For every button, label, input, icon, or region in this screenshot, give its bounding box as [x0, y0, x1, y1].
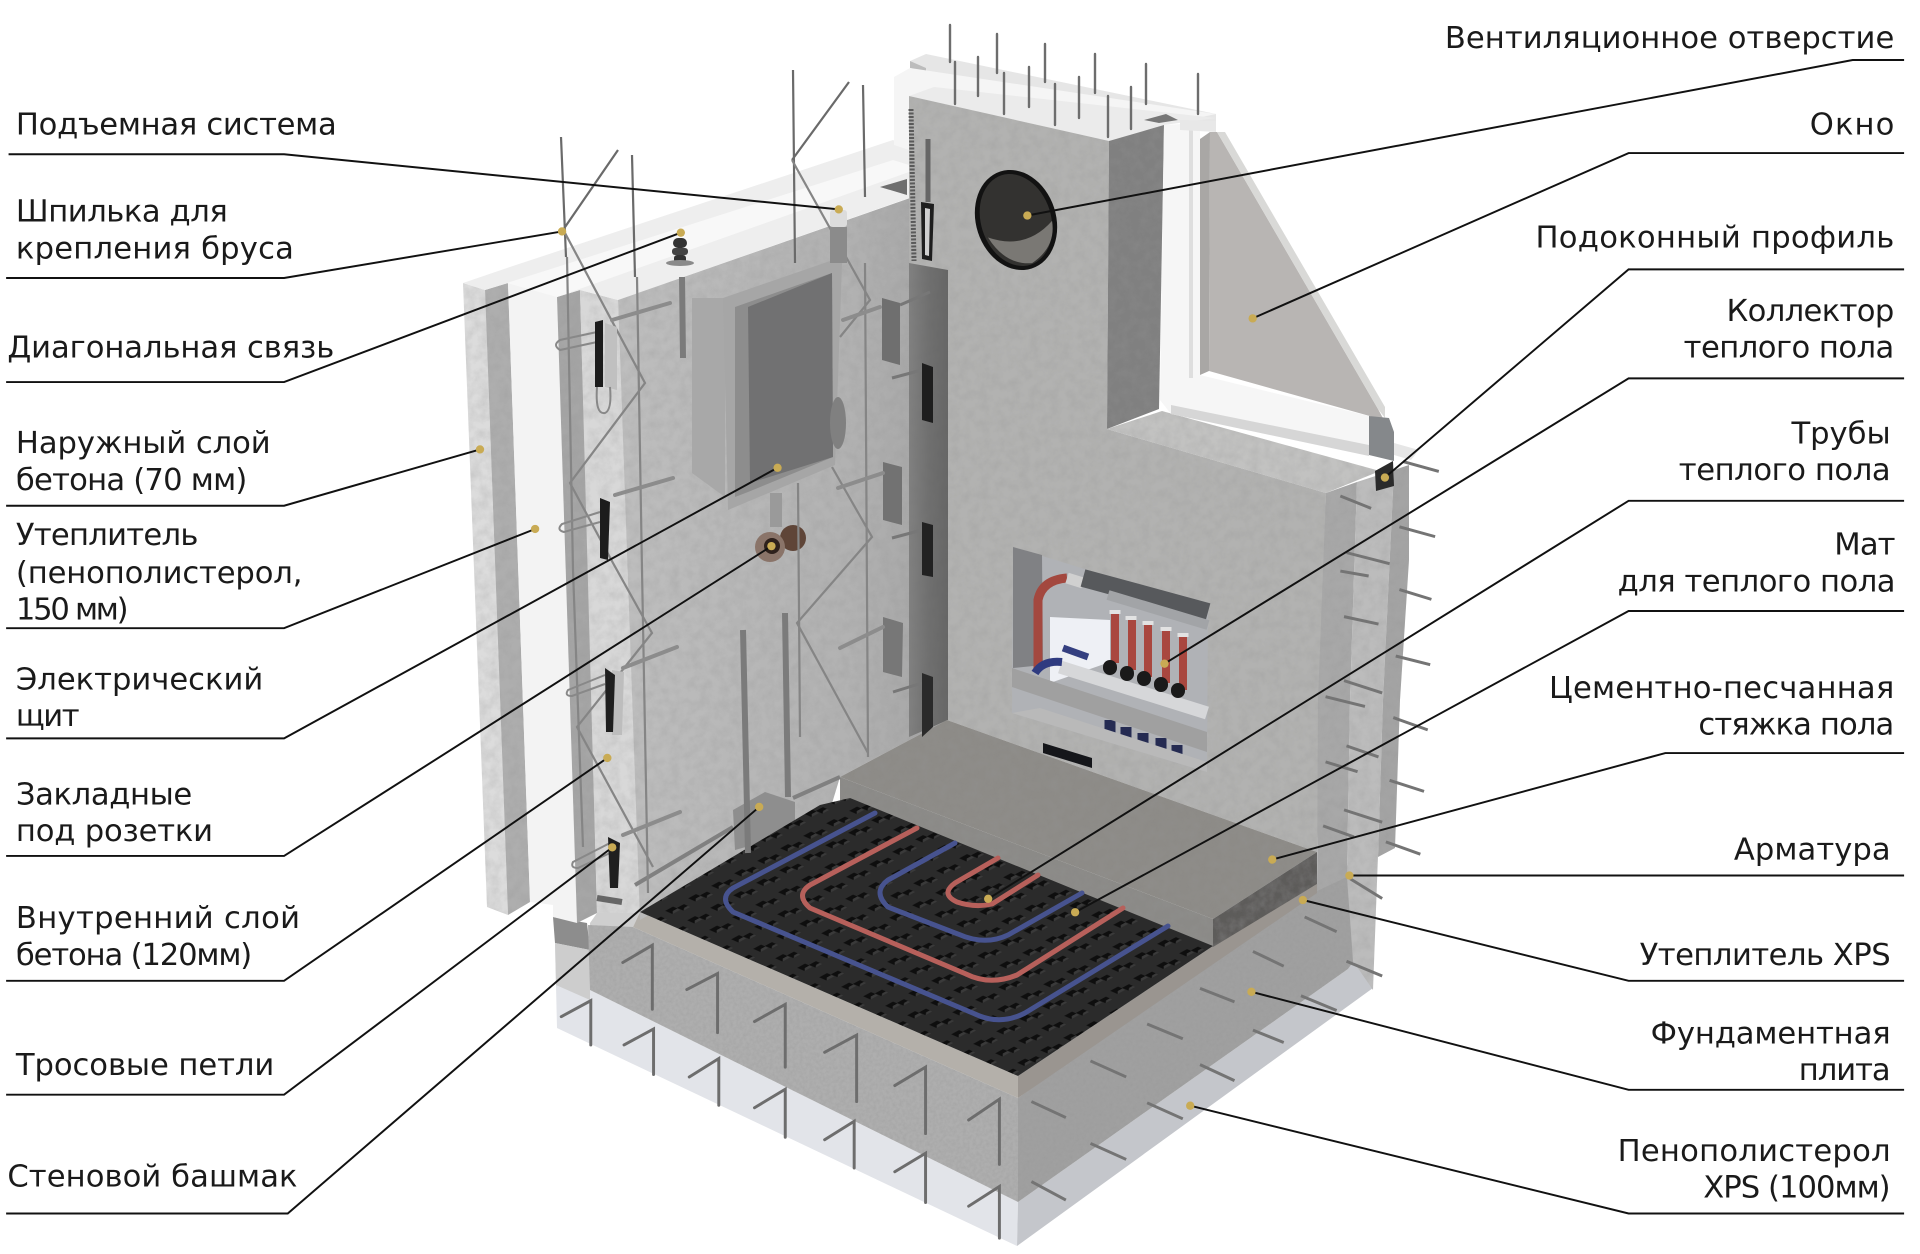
black bracket — [1375, 461, 1394, 491]
callout: тросовые петли — [6, 843, 616, 1095]
floor heating manifold niche — [1012, 547, 1208, 772]
foundation rebar, right face — [1031, 879, 1382, 1200]
XPS insulation under foundation — [555, 943, 1373, 1246]
wall shoe box — [733, 792, 795, 850]
callout: электрический щит — [6, 464, 782, 738]
foundation slab — [588, 860, 1356, 1202]
screed — [840, 720, 1317, 947]
callout: закладные под розетки: Закладные — [16, 777, 192, 812]
callout: цементно-песчанная стяжка пола — [1268, 671, 1904, 864]
callout: внутренний слой бетона: бетона (120мм) — [16, 938, 252, 973]
callout: вентиляционное отверстие: Вентиляционное отверстие — [1445, 21, 1894, 56]
bolt — [666, 238, 694, 266]
electrical panel — [692, 260, 846, 510]
callout: электрический щит: Электрический — [16, 662, 263, 697]
callout: фундаментная плита — [1247, 988, 1904, 1090]
callout: утеплитель — [6, 518, 539, 628]
sill — [1107, 411, 1380, 493]
callout: закладные под розетки — [6, 542, 776, 856]
callout: цементно-песчанная стяжка пола: Цементно-песчанная — [1549, 671, 1894, 706]
callout: наружный слой бетона: Наружный слой — [16, 426, 271, 461]
dark column at wall corner — [909, 263, 948, 737]
callout: утеплитель: (пенополистерол, — [16, 556, 302, 591]
callout: стеновой башмак: Стеновой башмак — [7, 1160, 298, 1195]
callout: наружный слой бетона: бетона (70 мм) — [16, 463, 247, 498]
callout: закладные под розетки: под розетки — [16, 814, 213, 849]
wall ties and vertical bars — [561, 70, 872, 893]
callout: фундаментная плита: плита — [1799, 1053, 1891, 1088]
callout: подоконный профиль: Подоконный профиль — [1536, 220, 1894, 255]
foundation hooks, left face — [561, 945, 999, 1238]
lifting post — [830, 210, 847, 263]
rebar at wall end — [1323, 462, 1439, 854]
callout: утеплитель XPS — [1299, 896, 1904, 981]
callout: цементно-песчанная стяжка пола: стяжка пола — [1698, 708, 1894, 743]
callout: шпилька для крепления бруса: Шпилька для — [16, 195, 228, 230]
callout: арматура — [1345, 833, 1904, 880]
heating pipes — [726, 813, 1168, 1020]
drainage mat — [640, 798, 1213, 1076]
right wall end — [1317, 465, 1409, 990]
callout: утеплитель: 150 мм) — [16, 593, 129, 628]
window — [1160, 120, 1419, 491]
callout: окно: Окно — [1810, 108, 1894, 143]
back wall front face — [909, 96, 1326, 852]
callout: подоконный профиль — [1381, 220, 1904, 482]
ventilation opening — [962, 159, 1070, 281]
conduits — [755, 493, 806, 562]
rebars in original scale — [561, 462, 1439, 1238]
floor vent grille — [1043, 743, 1092, 768]
sill profile — [1369, 416, 1394, 461]
lower wall block — [553, 912, 640, 1000]
callout: мат для теплого пола — [1071, 528, 1904, 916]
callout: коллектор теплого пола — [1160, 294, 1904, 668]
glass — [1209, 132, 1384, 420]
wall base rods — [635, 777, 840, 885]
callout: диагональная связь — [6, 228, 685, 382]
insulation layer — [508, 283, 577, 923]
inner concrete layer — [618, 198, 947, 920]
callout: пенополистерол XPS — [1186, 1102, 1904, 1213]
callout: арматура: Арматура — [1734, 833, 1891, 868]
callout: трубы теплого пола: Трубы — [1790, 416, 1891, 451]
callout: коллектор теплого пола: теплого пола — [1684, 331, 1894, 366]
callout: пенополистерол XPS: XPS (100мм) — [1703, 1171, 1891, 1206]
window reveal — [1107, 125, 1164, 429]
callout: подъемная система: Подъемная система — [16, 108, 337, 143]
frame — [1160, 123, 1369, 455]
callout: шпилька для крепления бруса — [6, 195, 566, 278]
rebar outlets at wall top — [950, 25, 1198, 137]
callout: фундаментная плита: Фундаментная — [1651, 1016, 1891, 1051]
inner layer end face — [557, 290, 640, 923]
callout: трубы теплого пола — [984, 416, 1904, 903]
callout: тросовые петли: Тросовые петли — [15, 1048, 274, 1083]
panel top surface — [463, 140, 909, 300]
callout: диагональная связь: Диагональная связь — [7, 331, 334, 366]
callout: электрический щит: щит — [16, 699, 80, 734]
outer concrete layer — [463, 283, 530, 915]
callout: мат для теплого пола: Мат — [1834, 528, 1896, 563]
callout: шпилька для крепления бруса: крепления бруса — [16, 231, 294, 266]
callout: стеновой башмак — [6, 803, 763, 1213]
callout: пенополистерол XPS: Пенополистерол — [1618, 1134, 1891, 1169]
callout: внутренний слой бетона — [6, 754, 612, 981]
callout: внутренний слой бетона: Внутренний слой — [16, 901, 300, 936]
callout: утеплитель XPS: Утеплитель XPS — [1640, 938, 1891, 973]
callout: коллектор теплого пола: Коллектор — [1727, 294, 1894, 329]
callout: окно — [1249, 108, 1904, 323]
callout: мат для теплого пола: для теплого пола — [1618, 564, 1896, 599]
lifting loops and embeds — [556, 109, 934, 902]
callout: трубы теплого пола: теплого пола — [1679, 453, 1891, 488]
upper layers of back wall — [894, 54, 1216, 150]
callout: наружный слой бетона — [6, 426, 484, 506]
callout: вентиляционное отверстие — [1023, 21, 1904, 220]
illustration: wall panel cutaway — [463, 25, 1439, 1246]
callout: утеплитель: Утеплитель — [16, 518, 198, 553]
callout: подъемная система — [9, 108, 843, 214]
